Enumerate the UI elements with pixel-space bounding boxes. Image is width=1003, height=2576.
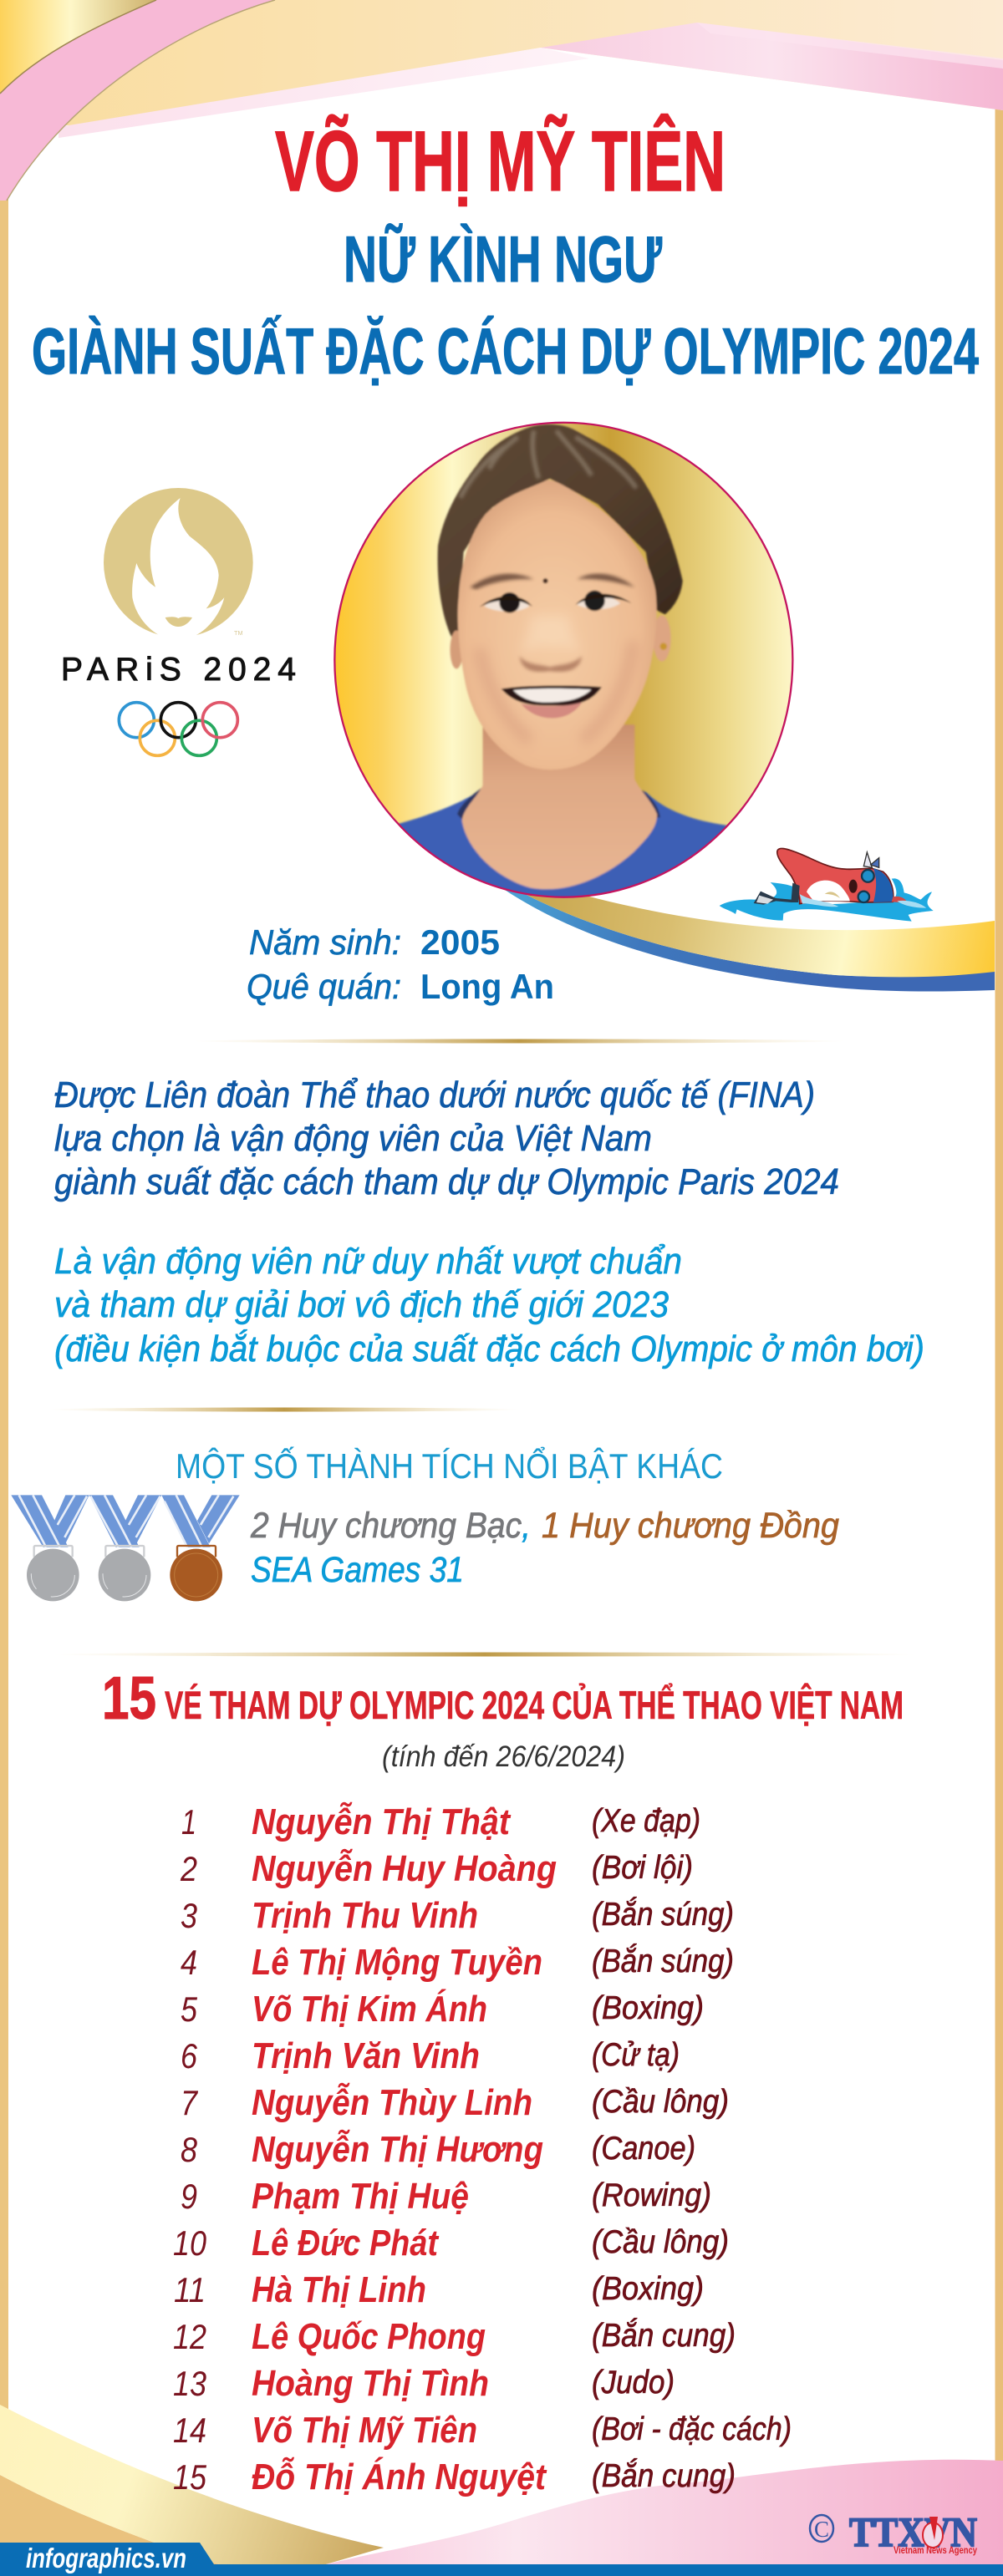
title: line 2: NỮ KÌNH NGƯ xyxy=(344,222,662,296)
portrait ear left xyxy=(450,630,463,668)
row 15: (Bắn cung) xyxy=(592,2458,736,2494)
row 14: 14 xyxy=(173,2411,206,2450)
copyright symbol: C xyxy=(814,2517,829,2542)
row 13: (Judo) xyxy=(592,2365,675,2401)
paragraph: world championship xyxy=(54,1241,924,1369)
paragraph: world championship: và tham dự giải bơi vô địch thế giới 2023 xyxy=(54,1284,669,1325)
portrait brows xyxy=(470,574,634,590)
paragraph: world championship: Là vận động viên nữ duy nhất vượt chuẩn xyxy=(54,1241,682,1282)
home town: Long An xyxy=(420,967,554,1006)
row 3 xyxy=(181,1895,734,1936)
row 12: Lê Quốc Phong xyxy=(252,2316,486,2357)
birth year: Năm sinh: xyxy=(249,922,401,962)
portrait ear right xyxy=(653,616,671,662)
portrait shirt xyxy=(398,789,727,904)
row 6: Trịnh Văn Vinh xyxy=(252,2035,480,2076)
mascot belly xyxy=(807,881,850,901)
footer site name: infographics.vn xyxy=(26,2543,186,2573)
row 15: 15 xyxy=(173,2457,207,2497)
home town: Quê quán: xyxy=(247,967,401,1006)
row 4 xyxy=(181,1942,734,1983)
row 8 xyxy=(181,2128,695,2170)
birth year xyxy=(249,922,500,962)
paragraph: FINA selection: lựa chọn là vận động viên của Việt Nam xyxy=(54,1118,652,1159)
portrait mouth xyxy=(502,685,602,705)
row 5: (Boxing) xyxy=(592,1990,704,2026)
birth year: 2005 xyxy=(420,922,500,962)
swoosh ribbon xyxy=(461,855,995,992)
row 7: (Cầu lông) xyxy=(592,2084,729,2120)
row 8: (Canoe) xyxy=(592,2131,695,2167)
row 6: 6 xyxy=(181,2036,198,2076)
row 12: (Bắn cung) xyxy=(592,2318,736,2354)
row 10 xyxy=(173,2223,729,2264)
top decoration: roof and ribbon xyxy=(0,0,1003,201)
achievement text: SEA Games 31 xyxy=(251,1550,464,1590)
home town xyxy=(247,967,554,1006)
mascot arm and hand xyxy=(754,883,800,905)
portrait hair xyxy=(438,424,683,637)
row 9 xyxy=(181,2176,711,2217)
portrait collar xyxy=(457,787,660,821)
row 6 xyxy=(181,2035,680,2076)
personal info xyxy=(247,922,554,1006)
logo wordmark: PARiS 2024 xyxy=(61,652,296,688)
row 13: Hoàng Thị Tình xyxy=(252,2363,489,2404)
portrait hair highlights xyxy=(461,430,636,498)
row 14: Võ Thị Mỹ Tiên xyxy=(252,2410,477,2451)
athlete list xyxy=(173,1801,792,2497)
row 9: Phạm Thị Huệ xyxy=(252,2176,469,2217)
portrait earring xyxy=(660,643,667,650)
olympic rings xyxy=(119,703,237,755)
mascot: swimming Phryge xyxy=(720,848,934,922)
row 7: 7 xyxy=(181,2083,198,2122)
row 4: (Bắn súng) xyxy=(592,1943,734,1979)
row 12: 12 xyxy=(173,2317,206,2356)
achievement text: 2 Huy chương Bạc, xyxy=(250,1506,531,1546)
paragraph: world championship: (điều kiện bắt buộc của suất đặc cách Olympic ở môn bơi) xyxy=(54,1329,924,1369)
achievement text: 1 Huy chương Đồng xyxy=(542,1506,839,1546)
logo emblem: flame and face: TM xyxy=(234,629,243,637)
row 10: Lê Đức Phát xyxy=(252,2223,440,2264)
row 8: 8 xyxy=(181,2130,198,2169)
row 14: (Bơi - đặc cách) xyxy=(592,2411,792,2447)
list date note: (tính đến 26/6/2024) xyxy=(382,1740,625,1773)
portrait nose xyxy=(520,656,582,672)
row 3: 3 xyxy=(181,1896,197,1935)
portrait mole xyxy=(542,578,548,583)
portrait neck xyxy=(462,722,657,889)
portrait face xyxy=(458,480,657,770)
mascot goggles xyxy=(862,870,874,882)
row 4: Lê Thị Mộng Tuyền xyxy=(252,1942,542,1983)
list heading: 15 xyxy=(102,1665,156,1732)
row 11: (Boxing) xyxy=(592,2271,704,2307)
portrait eyes xyxy=(484,597,529,612)
heading: achievements: MỘT SỐ THÀNH TÍCH NỔI BẬT KHÁC xyxy=(176,1445,723,1486)
row 3: (Bắn súng) xyxy=(592,1897,734,1933)
row 2: 2 xyxy=(180,1849,197,1888)
row 9: (Rowing) xyxy=(592,2177,711,2213)
row 5: 5 xyxy=(181,1989,198,2029)
row 5 xyxy=(181,1988,704,2030)
logo: Paris 2024 xyxy=(61,488,296,755)
achievement text xyxy=(250,1506,839,1590)
row 13: 13 xyxy=(173,2364,206,2403)
row 2: Nguyễn Huy Hoàng xyxy=(252,1847,557,1889)
portrait cheek shading xyxy=(480,642,633,741)
row 13 xyxy=(173,2363,675,2404)
row 3: Trịnh Thu Vinh xyxy=(252,1895,478,1936)
row 1 xyxy=(181,1801,700,1842)
row 7 xyxy=(181,2081,729,2123)
row 5: Võ Thị Kim Ánh xyxy=(252,1988,487,2030)
agency name: Vietnam News Agency xyxy=(894,2544,977,2556)
TTXVN wordmark: TTXVN xyxy=(849,2508,977,2555)
row 1: Nguyễn Thị Thật xyxy=(252,1801,512,1842)
row 4: 4 xyxy=(181,1943,197,1982)
logo: TTXVN xyxy=(810,2508,977,2556)
row 10: (Cầu lông) xyxy=(592,2224,729,2260)
title: athlete name: VÕ THỊ MỸ TIÊN xyxy=(275,114,726,209)
icon: medals xyxy=(11,1495,240,1601)
mascot body xyxy=(777,848,894,904)
paragraph: FINA selection: giành suất đặc cách tham dự dự Olympic Paris 2024 xyxy=(54,1161,839,1202)
row 8: Nguyễn Thị Hương xyxy=(252,2128,543,2170)
row 14 xyxy=(173,2410,792,2451)
photo: athlete portrait xyxy=(334,423,793,904)
row 1: 1 xyxy=(181,1802,196,1842)
row 2 xyxy=(180,1847,693,1889)
row 11 xyxy=(174,2269,704,2310)
mascot water splash xyxy=(720,878,934,922)
mascot foam xyxy=(800,894,926,908)
title xyxy=(32,114,979,388)
row 6: (Cử tạ) xyxy=(592,2037,680,2073)
mascot ribbon bow xyxy=(863,852,872,867)
logo emblem: flame and face xyxy=(104,488,253,642)
row 15: Đỗ Thị Ánh Nguyệt xyxy=(252,2456,547,2497)
paragraph: FINA selection: Được Liên đoàn Thể thao dưới nước quốc tế (FINA) xyxy=(54,1075,815,1115)
row 11: 11 xyxy=(174,2270,206,2309)
mascot back of head xyxy=(873,868,894,902)
row 11: Hà Thị Linh xyxy=(252,2269,426,2310)
row 2: (Bơi lội) xyxy=(592,1850,693,1886)
row 15 xyxy=(173,2456,736,2497)
row 7: Nguyễn Thùy Linh xyxy=(252,2081,532,2123)
row 12 xyxy=(173,2316,736,2357)
list heading xyxy=(102,1665,904,1732)
bottom decoration xyxy=(0,2405,1003,2576)
row 1: (Xe đạp) xyxy=(592,1803,700,1839)
row 9: 9 xyxy=(181,2177,197,2216)
row 10: 10 xyxy=(173,2223,207,2263)
paragraph: FINA selection xyxy=(54,1075,839,1202)
copyright symbol xyxy=(810,2515,833,2542)
